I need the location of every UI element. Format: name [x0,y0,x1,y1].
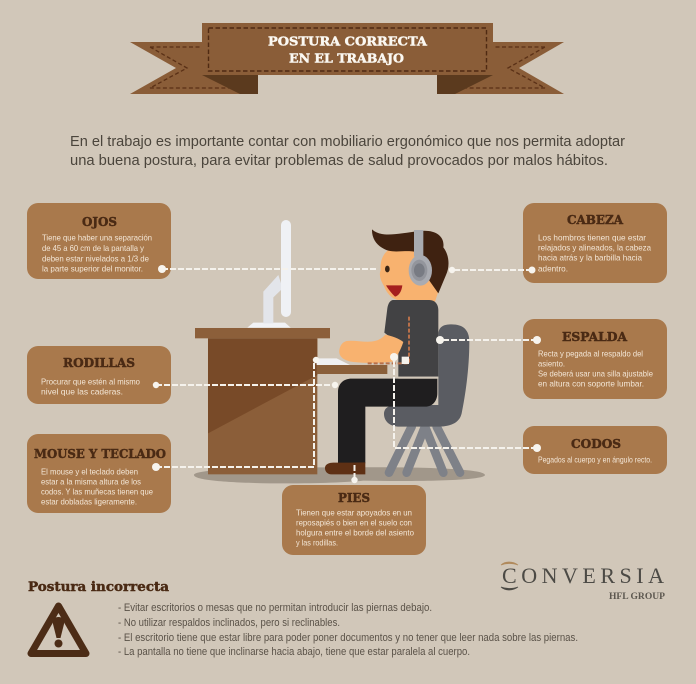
person [325,229,449,474]
heading: pies: PIES [338,491,370,505]
panel: espalda [523,319,667,399]
connector: pies [351,465,358,483]
logo: conversia [501,562,665,602]
arm [339,335,403,363]
text: ojos: deben estar nivelados a 1/3 de [42,254,149,264]
text: espalda: asiento. [538,360,565,368]
heading: codos: CODOS [571,437,621,451]
text: pies: Tienen que estar apoyados en un [296,508,412,518]
logo: conversia: HFL GROUP [609,592,665,602]
title text: EN EL TRABAJO [289,50,404,66]
icon: monitor [247,220,291,328]
floor shadow [194,467,485,483]
text: espalda: Se deberá usar una silla ajustable [538,370,653,378]
text: pies: reposapiés o bien en el suelo con [296,518,412,528]
keyboard tray [317,358,387,374]
title text [268,34,427,66]
text: rodillas: Procurar que estén al mismo [41,378,140,386]
text: ojos: la parte superior del monitor. [42,264,143,274]
shoe [325,462,365,474]
trousers [338,379,437,463]
text: cabeza: relajados y alineados, la cabeza [538,244,651,252]
connector: rodillas [153,382,338,388]
chair [384,324,469,473]
list: postura incorrecta: - No utilizar respaldos inclinados, pero si reclinables. [118,617,340,629]
heading: mouse y teclado: MOUSE Y TECLADO [34,447,166,461]
elbow angle marker [367,317,409,364]
connector: espalda [436,336,541,344]
eye [385,266,390,272]
heading: postura incorrecta: Postura incorrecta [28,580,170,595]
text: rodillas: nivel que las caderas. [41,388,123,396]
headphones [409,230,432,286]
text: rodillas [41,378,140,396]
list: postura incorrecta: - La pantalla no tiene que inclinarse hacia abajo, tiene que estar paralela al cuerpo. [118,646,470,658]
title text: POSTURA CORRECTA [268,34,427,48]
text: cabeza: Los hombros tienen que estar [538,234,646,242]
text: mouse y teclado [41,468,153,506]
text: espalda: Recta y pegada al respaldo del [538,350,643,358]
text: espalda: en altura con soporte lumbar. [538,380,644,388]
text: ojos [42,234,152,274]
list: postura incorrecta [118,602,578,658]
desk [195,328,330,474]
mouth [386,285,402,297]
heading: cabeza: CABEZA [567,213,624,227]
connector: mouse y teclado [152,357,319,471]
heading: ojos: OJOS [82,215,117,229]
text: pies: y las rodillas. [296,538,338,548]
text: ojos: Tiene que haber una separación [42,234,152,242]
illustration: person at desk [194,220,485,483]
text: mouse y teclado: estar a la misma altura de los [41,478,141,486]
intro text: En el trabajo es importante contar con mobiliario ergonómico que nos permita adoptar [70,133,625,150]
banner main panel [202,23,493,75]
neck and head [380,243,438,302]
intro text [70,133,625,169]
banner left tail [130,42,258,94]
icon: warning triangle [31,606,86,654]
connector: cabeza [449,266,536,274]
intro text: una buena postura, para evitar problemas de salud provocados por malos hábitos. [70,152,608,169]
text: ojos: de 45 a 60 cm de la pantalla y [42,244,145,253]
list: postura incorrecta: - Evitar escritorios o mesas que no permitan introducir las piernas debajo. [118,602,432,614]
connector: ojos [158,265,378,273]
panel: cabeza [523,203,667,283]
torso [384,300,438,377]
list: postura incorrecta: - El escritorio tiene que estar libre para poder poner documentos y no tener que leer nada sobre las piernas. [118,632,578,644]
text: pies [296,508,414,548]
text: cabeza: adentro. [538,264,568,274]
hair [372,229,449,293]
connector: codos [390,353,541,452]
heading: espalda: ESPALDA [562,330,628,344]
text: mouse y teclado: El mouse y el teclado deben [41,468,138,476]
title banner [130,23,564,94]
heading: rodillas: RODILLAS [63,356,135,370]
panel: rodillas [27,346,171,404]
panel: pies [282,485,426,555]
panel: codos [523,426,667,474]
panel: mouse y teclado [27,434,171,513]
text: pies: holgura entre el borde del asiento [296,528,414,538]
logo: conversia: CONVERSIA [502,563,664,588]
text: mouse y teclado: codos. Y las muñecas tienen que [41,488,153,496]
banner right tail [437,42,564,94]
panel: ojos [27,203,171,279]
text: mouse y teclado: estar dobladas ligeramente. [41,498,137,506]
text: codos: Pegados al cuerpo y en ángulo recto. [538,456,652,464]
text: cabeza: hacia atrás y la barbilla hacia [538,254,642,262]
text: espalda [538,350,653,388]
text: cabeza [538,234,651,274]
